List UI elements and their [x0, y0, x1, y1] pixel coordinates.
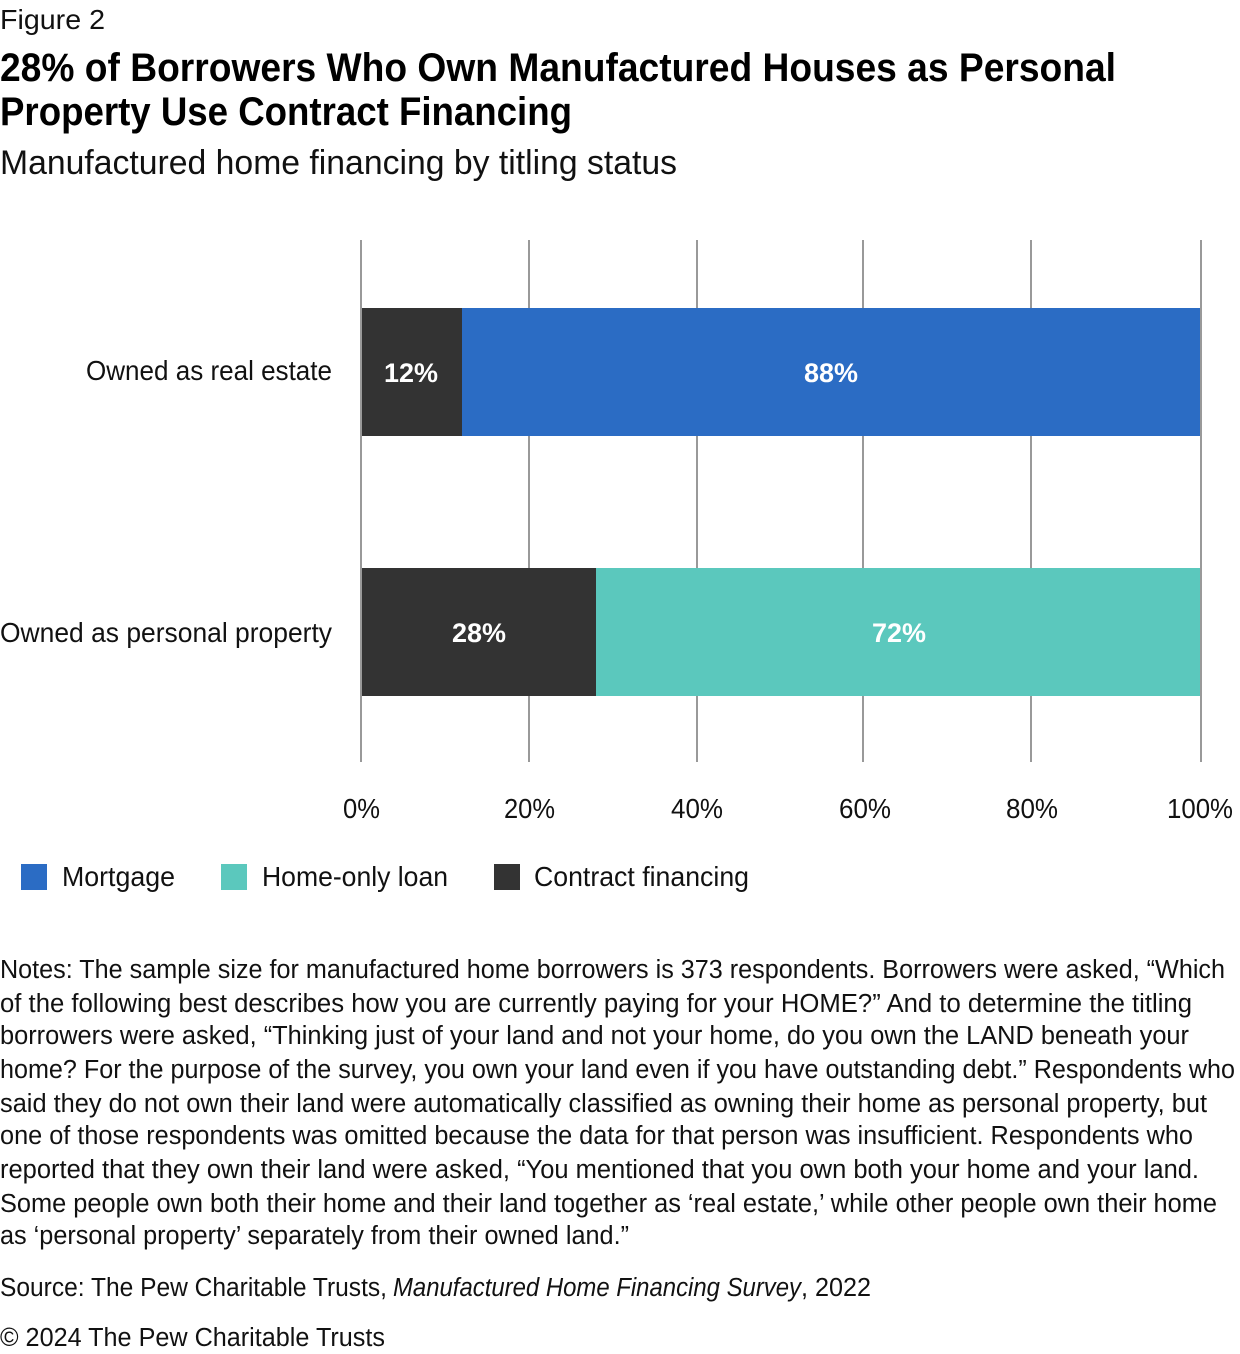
row: owned as real estate: [86, 308, 1200, 436]
legend: Home-only loan: [262, 861, 448, 892]
title: [0, 46, 1116, 134]
row: owned as personal property: [0, 568, 1200, 696]
x axis labels: 80%: [1006, 793, 1058, 824]
notes: as ‘personal property’ separately from their owned land.”: [0, 1222, 629, 1250]
x axis labels: [343, 793, 1233, 824]
row: owned as real estate: 88%: [804, 358, 858, 388]
legend: Contract financing: [534, 861, 749, 892]
x axis labels: 60%: [839, 793, 891, 824]
figure label: Figure 2: [0, 4, 105, 35]
notes: one of those respondents was omitted because the data for that person was insufficient. Respondents who: [0, 1122, 1193, 1150]
row: owned as personal property: 28%: [452, 618, 506, 648]
notes: borrowers were asked, “Thinking just of your land and not your home, do you own the LAND beneath your: [0, 1022, 1189, 1050]
x axis labels: 40%: [671, 793, 723, 824]
notes: said they do not own their land were automatically classified as owning their home as personal property, but: [0, 1090, 1207, 1118]
notes: home? For the purpose of the survey, you own your land even if you have outstanding debt.” Respondents who: [0, 1056, 1235, 1084]
source: Source: The Pew Charitable Trusts,: [0, 1274, 387, 1302]
row: owned as personal property: 72%: [872, 618, 926, 648]
row: owned as real estate: Owned as real estate: [86, 355, 332, 386]
source: [0, 1274, 871, 1302]
title: Property Use Contract Financing: [0, 90, 572, 134]
source: , 2022: [801, 1274, 871, 1302]
x axis labels: 20%: [504, 793, 555, 824]
copyright: © 2024 The Pew Charitable Trusts: [0, 1324, 385, 1352]
notes: [0, 956, 1235, 1250]
x axis labels: 0%: [343, 793, 380, 824]
stacked bar chart: [0, 240, 1233, 824]
notes: Some people own both their home and their land together as ‘real estate,’ while other people own their home: [0, 1190, 1217, 1218]
legend: [21, 861, 749, 892]
notes: reported that they own their land were asked, “You mentioned that you own both your home and your land.: [0, 1156, 1199, 1184]
row: owned as real estate: 12%: [384, 358, 438, 388]
source: Manufactured Home Financing Survey: [393, 1274, 803, 1302]
subtitle: Manufactured home financing by titling status: [0, 144, 677, 182]
notes: Notes: The sample size for manufactured home borrowers is 373 respondents. Borrowers were asked, “Which: [0, 956, 1225, 984]
legend: Mortgage: [62, 861, 175, 892]
row: owned as personal property: Owned as personal property: [0, 617, 332, 648]
title: 28% of Borrowers Who Own Manufactured Houses as Personal: [0, 46, 1116, 90]
notes: of the following best describes how you are currently paying for your HOME?” And to determine the titling: [0, 990, 1192, 1018]
x axis labels: 100%: [1167, 793, 1233, 824]
